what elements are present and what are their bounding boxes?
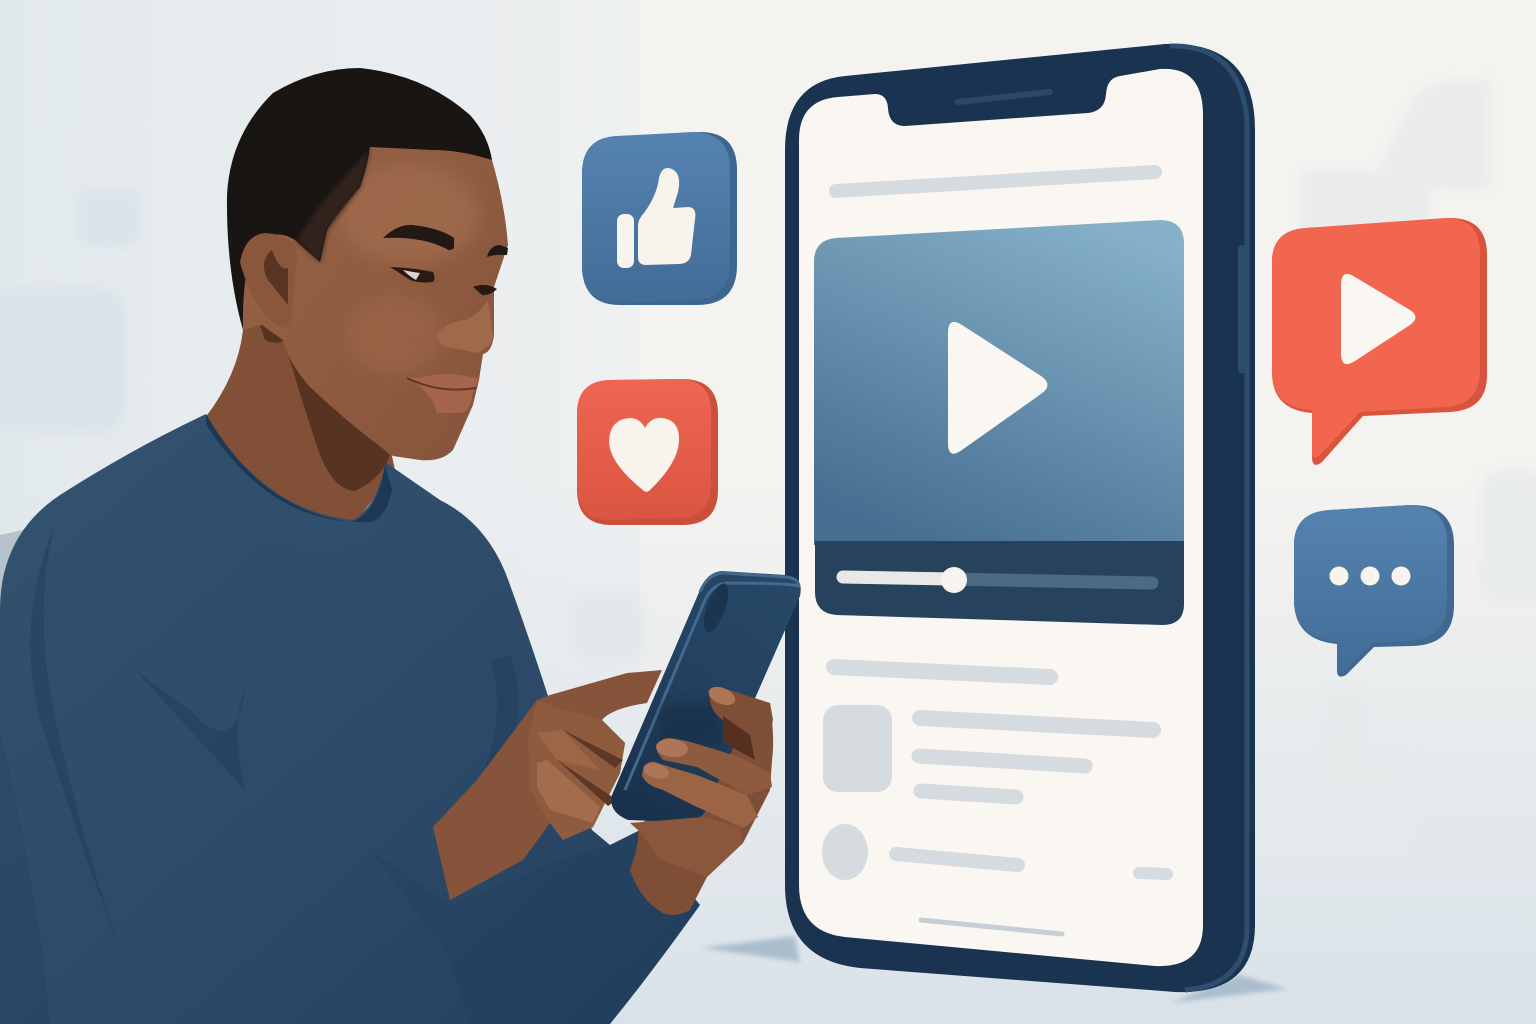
floor shadow	[702, 936, 1287, 1003]
fingers	[630, 683, 773, 877]
progress fill	[843, 577, 954, 579]
right eyebrow	[487, 245, 508, 257]
web shadow	[723, 716, 755, 760]
holding hand back	[630, 703, 773, 915]
chair	[0, 528, 32, 720]
sweater torso and arm	[0, 414, 700, 1024]
progress track	[843, 577, 1152, 583]
progress thumb	[941, 567, 967, 593]
phone screen	[799, 69, 1203, 966]
video player	[814, 220, 1184, 625]
thumb	[710, 687, 773, 760]
icon: blue comment bubble	[1294, 505, 1454, 677]
pointing hand	[433, 670, 662, 900]
left eye	[390, 267, 434, 282]
video area	[814, 220, 1184, 545]
face highlight	[340, 165, 480, 265]
inner ear	[264, 250, 288, 305]
control bar	[815, 541, 1184, 625]
neck	[205, 300, 395, 530]
large phone	[785, 44, 1255, 992]
jaw shadow on neck	[283, 335, 390, 491]
hair	[227, 68, 492, 330]
hand shadow on phone	[660, 700, 725, 745]
icon: heart	[577, 379, 718, 525]
phone highlight	[625, 573, 799, 790]
ear shadow	[255, 310, 295, 343]
speaker	[958, 92, 1050, 102]
head	[237, 110, 508, 460]
thumbnail	[706, 683, 738, 709]
palm bottom	[630, 817, 743, 877]
ear	[240, 233, 297, 327]
collar shadow	[206, 414, 392, 522]
header bar	[836, 172, 1155, 191]
right eye	[473, 285, 497, 295]
nose	[437, 300, 493, 353]
person	[0, 68, 801, 1024]
side button	[1238, 245, 1246, 373]
icon: thumbs up	[582, 132, 737, 305]
phone body	[785, 44, 1255, 992]
middle finger	[657, 738, 772, 795]
content placeholders	[822, 667, 1167, 934]
lower finger	[642, 762, 758, 828]
camera bump	[699, 580, 733, 636]
left eyebrow	[383, 225, 454, 250]
play button	[948, 322, 1048, 454]
icon: red video chat bubble	[1272, 218, 1487, 465]
collar	[203, 414, 391, 550]
lips	[407, 374, 479, 413]
small phone	[611, 571, 801, 823]
hair fade	[296, 148, 370, 262]
sweater fold shadows	[0, 525, 700, 1024]
